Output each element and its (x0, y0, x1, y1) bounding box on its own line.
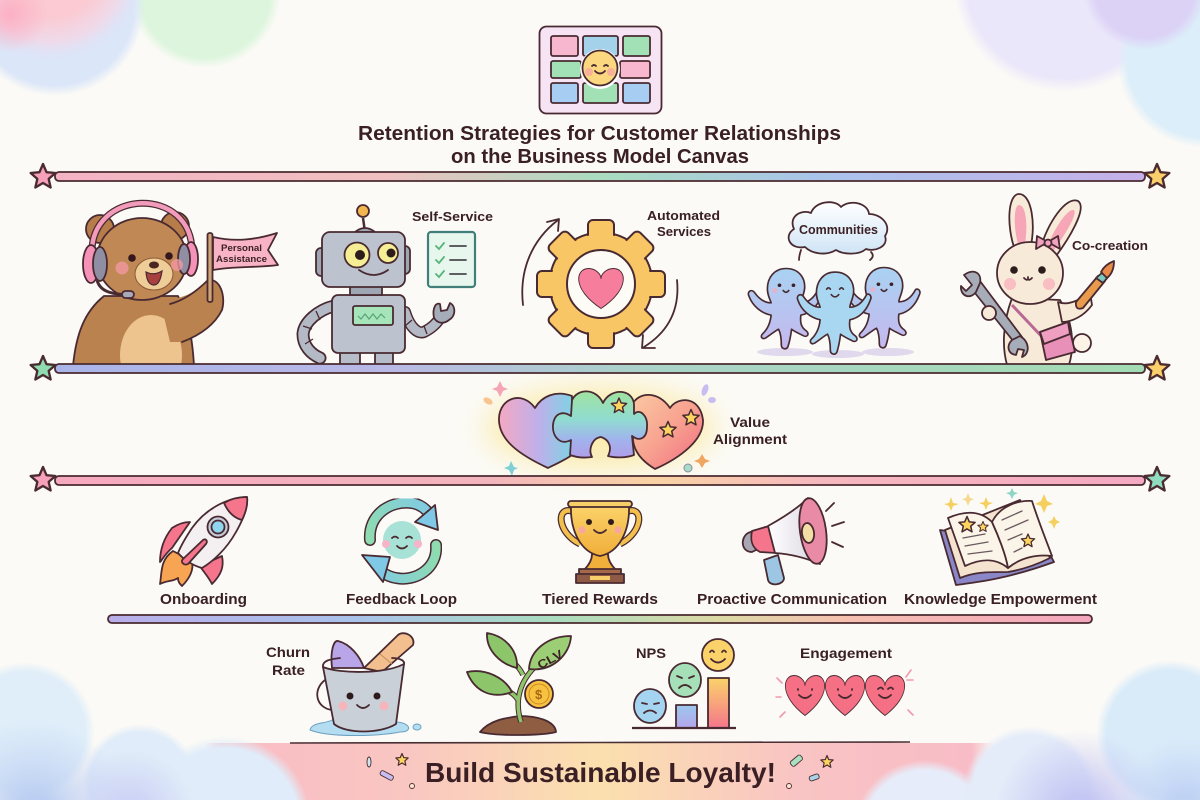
icon: trophy (561, 501, 639, 583)
icon: CLV plant with coin (467, 633, 571, 735)
left heart piece (499, 394, 572, 468)
robot with checklist (303, 205, 454, 367)
label: Churn Rate: Rate (272, 662, 305, 678)
label: Automated Services (647, 208, 720, 239)
puddle (310, 720, 409, 736)
confetti left of banner text (367, 754, 414, 788)
robot body (332, 295, 405, 353)
robot ears (315, 247, 322, 277)
cloud label: Communities (789, 202, 887, 260)
handle (317, 680, 332, 710)
sparkles (944, 497, 959, 511)
happy face (702, 639, 734, 671)
sparkle ticks (776, 670, 913, 717)
robot head (322, 232, 405, 287)
bunny ears (1009, 194, 1033, 250)
icon: checklist clipboard (428, 232, 475, 287)
label: Value Alignment: Value (730, 414, 770, 430)
row of strategy labels: Knowledge Empowerment (904, 591, 1097, 608)
title (358, 122, 841, 168)
label: Value Alignment: Alignment (713, 431, 787, 447)
background: bottom-left pastel cloud (0, 660, 315, 800)
row of strategy labels: Onboarding (160, 591, 247, 608)
bunny bow (1036, 236, 1060, 249)
headphone band (92, 203, 192, 256)
divider bar 2 with stars (31, 356, 1169, 380)
centre puzzle piece (553, 391, 647, 458)
robot antenna (363, 218, 365, 232)
figure centre (797, 272, 871, 354)
purple leaf (331, 641, 364, 668)
bottom divider line (290, 742, 910, 743)
bear face (135, 258, 173, 290)
rotation arrows (522, 219, 559, 305)
divider bar 4 (108, 615, 1092, 623)
title: Retention Strategies for Customer Relationships (358, 122, 841, 145)
row of strategy labels: Feedback Loop (346, 591, 457, 608)
stem (500, 655, 538, 722)
bag strap and bag (1011, 304, 1040, 338)
ear cups (83, 245, 99, 283)
background: bottom-right pastel cloud (850, 658, 1200, 800)
heart (579, 268, 623, 308)
bottom banner wash (205, 743, 995, 800)
icon: rocket (160, 497, 247, 586)
icon: CLV plant with coin: CLV (535, 647, 565, 672)
bear waving arm (160, 280, 223, 342)
row of strategy labels: Proactive Communication (697, 591, 887, 608)
label: Churn Rate: Churn (266, 644, 310, 660)
bandage (364, 633, 413, 672)
sound lines (826, 503, 844, 547)
robot neck (350, 286, 382, 295)
divider bar 1 with stars (31, 164, 1169, 188)
flag: Personal Assistance (208, 233, 278, 302)
bunny raised arm (1057, 298, 1093, 323)
icon: business model canvas with smiley (540, 26, 662, 114)
label: Co-creation: Co-creation (1072, 238, 1148, 253)
three dancing community figures (748, 268, 920, 358)
icon: CLV plant with coin: $ (535, 687, 543, 702)
row of strategy labels: Tiered Rewards (542, 591, 658, 608)
icon: feedback loop (362, 503, 438, 582)
icon: paintbrush held by bunny (1076, 261, 1114, 309)
mic boom (96, 280, 122, 296)
figure shadows (757, 348, 813, 356)
soil (480, 716, 556, 735)
flag: Personal Assistance: Personal (221, 243, 262, 254)
background: top-left pastel cloud (0, 0, 290, 100)
robot legs (339, 354, 361, 364)
label: Self-Service: Self-Service (412, 209, 493, 224)
label: Automated Services: Automated (647, 208, 720, 223)
bear belly (120, 315, 182, 364)
NPS chart with faces and bars (632, 639, 736, 728)
puzzle hearts: value alignment (482, 381, 716, 476)
cloud label: Communities: Communities (799, 222, 878, 237)
bucket (323, 664, 404, 732)
gear with heart and rotation arrows (522, 219, 677, 348)
bear head (97, 218, 187, 300)
icon: open book with stars (940, 488, 1060, 585)
row of strategy labels (160, 591, 1097, 608)
bunny tail (1073, 334, 1091, 352)
banner text: Build Sustainable Loyalty!: Build Sustainable Loyalty! (425, 757, 776, 788)
stars on hearts (611, 398, 627, 412)
title: on the Business Model Canvas (451, 145, 749, 168)
bear with headset holding flag (72, 200, 224, 364)
bunny head (997, 242, 1063, 304)
label: NPS: NPS (636, 645, 666, 661)
bear ears (86, 215, 114, 243)
icon: wrench held by bunny (961, 272, 1028, 357)
bear body (73, 296, 194, 366)
glow behind value alignment (485, 386, 715, 470)
label: Automated Services: Services (657, 224, 711, 239)
icon: three smiling hearts (776, 670, 913, 717)
neutral face (669, 663, 701, 697)
figure right (846, 268, 920, 348)
sad face (634, 689, 666, 723)
bunny with wrench and paintbrush (997, 194, 1092, 368)
divider bar 3 with stars (31, 467, 1169, 491)
bunny body (1004, 298, 1072, 368)
right heart piece (632, 395, 703, 469)
figure left (748, 269, 822, 349)
icon: megaphone with sound lines (743, 497, 844, 584)
icon: leaky bucket with bandage (310, 633, 421, 736)
gear (537, 220, 665, 348)
label: Value Alignment (713, 414, 787, 447)
robot left arm (303, 306, 334, 358)
background: top-right pastel cloud (950, 0, 1200, 150)
label: Engagement: Engagement (800, 645, 892, 661)
leaves (487, 633, 517, 668)
sparkles (492, 381, 508, 397)
flag: Personal Assistance: Assistance (216, 254, 267, 265)
label: Churn Rate (266, 644, 310, 678)
confetti right of banner text (786, 754, 833, 788)
coin (525, 680, 553, 708)
robot right arm (405, 312, 441, 332)
